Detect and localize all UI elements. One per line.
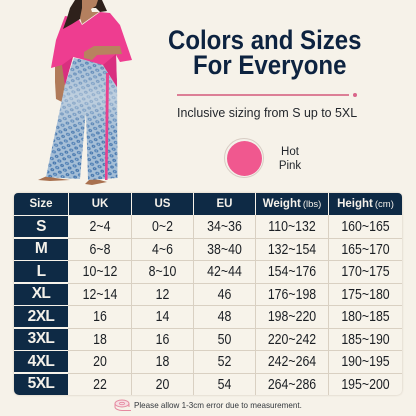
- row 3XL: 185~190: [341, 332, 390, 348]
- row M: 132~154: [268, 242, 316, 258]
- header row: US: [154, 198, 170, 210]
- row XL: 175~180: [341, 286, 390, 302]
- row S: 34~36: [207, 219, 242, 235]
- row XL: XL: [32, 285, 50, 302]
- row L: 170~175: [341, 264, 390, 280]
- table background: [14, 193, 402, 395]
- row L: 42~44: [207, 264, 242, 280]
- row 2XL: 198~220: [268, 309, 316, 325]
- color label: Pink: [279, 160, 301, 172]
- row 5XL: [14, 374, 390, 395]
- row M: 38~40: [207, 242, 242, 258]
- right forearm: [84, 46, 122, 60]
- row 5XL: 195~200: [341, 376, 390, 392]
- row S: 2~4: [90, 219, 110, 235]
- row 4XL: 20: [93, 354, 107, 370]
- model photo illustration: [38, 0, 132, 185]
- row 2XL: [14, 306, 390, 327]
- row 2XL: 180~185: [341, 309, 390, 325]
- row 5XL: 264~286: [268, 376, 316, 392]
- footnote: Please allow 1-3cm error due to measurement.: [134, 400, 302, 410]
- row XL: [14, 284, 390, 305]
- row XL: 12~14: [83, 286, 117, 302]
- header row: (cm): [375, 198, 394, 210]
- subtitle: Inclusive sizing from S up to 5XL: [177, 105, 357, 120]
- row 5XL: 5XL: [28, 375, 54, 392]
- row 4XL: 242~264: [268, 354, 316, 370]
- row 3XL: 220~242: [268, 332, 316, 348]
- row 3XL: 3XL: [28, 330, 54, 347]
- row L: 154~176: [268, 264, 316, 280]
- header row: Size: [29, 198, 52, 210]
- row 5XL: 20: [156, 376, 169, 392]
- row L: [14, 261, 390, 282]
- header row: [14, 193, 402, 215]
- header row: (lbs): [303, 198, 321, 210]
- row 4XL: 4XL: [28, 352, 54, 370]
- row S: S: [36, 218, 46, 234]
- row XL: 176~198: [268, 286, 316, 302]
- row M: 6~8: [90, 242, 110, 258]
- row 2XL: 14: [156, 309, 169, 325]
- row S: 110~132: [268, 219, 316, 235]
- row 4XL: 18: [156, 354, 169, 370]
- row S: 160~165: [341, 219, 390, 235]
- divider line with dot: [177, 93, 357, 97]
- row 5XL: 22: [93, 376, 107, 392]
- row XL: 12: [156, 286, 169, 302]
- size table: [13, 192, 403, 396]
- row 4XL: 52: [218, 354, 231, 370]
- row M: 4~6: [152, 242, 173, 258]
- row S: 0~2: [152, 219, 173, 235]
- face and neck: [80, 0, 99, 24]
- row M: 165~170: [341, 242, 390, 258]
- color swatch: hot pink: [224, 138, 264, 178]
- row 2XL: 16: [93, 309, 107, 325]
- header row: Height: [337, 198, 373, 210]
- icon: measuring tape: [114, 400, 131, 411]
- row 4XL: 190~195: [341, 354, 390, 370]
- title second line: For Everyone: [193, 50, 346, 80]
- side stripe: [105, 73, 109, 180]
- row XL: 46: [218, 286, 231, 302]
- row 2XL: 2XL: [28, 308, 54, 324]
- row M: [14, 239, 390, 260]
- color label: [279, 146, 302, 172]
- row 2XL: 48: [218, 309, 231, 325]
- header row: UK: [92, 198, 108, 210]
- row L: 8~10: [149, 264, 176, 280]
- hair: [63, 0, 107, 29]
- title: Colors and Sizes: [168, 25, 361, 55]
- row 3XL: 18: [93, 332, 107, 348]
- row 5XL: 54: [218, 376, 231, 392]
- feet: [38, 176, 107, 185]
- row 3XL: [14, 329, 390, 350]
- top fold shading: [62, 54, 117, 87]
- row 4XL: [14, 351, 390, 372]
- pants shading: [46, 58, 118, 180]
- grid lines: [68, 215, 402, 395]
- row S: [14, 216, 390, 237]
- left arm: [55, 64, 65, 102]
- row 3XL: 50: [218, 332, 231, 348]
- row M: M: [35, 240, 47, 257]
- pants: [46, 58, 118, 180]
- row L: L: [37, 262, 45, 280]
- pink top: [51, 12, 132, 87]
- row 3XL: 16: [156, 332, 169, 348]
- row L: 10~12: [83, 264, 117, 280]
- color label: Hot: [281, 146, 299, 158]
- header row: Weight: [263, 198, 301, 210]
- header row: EU: [216, 198, 232, 210]
